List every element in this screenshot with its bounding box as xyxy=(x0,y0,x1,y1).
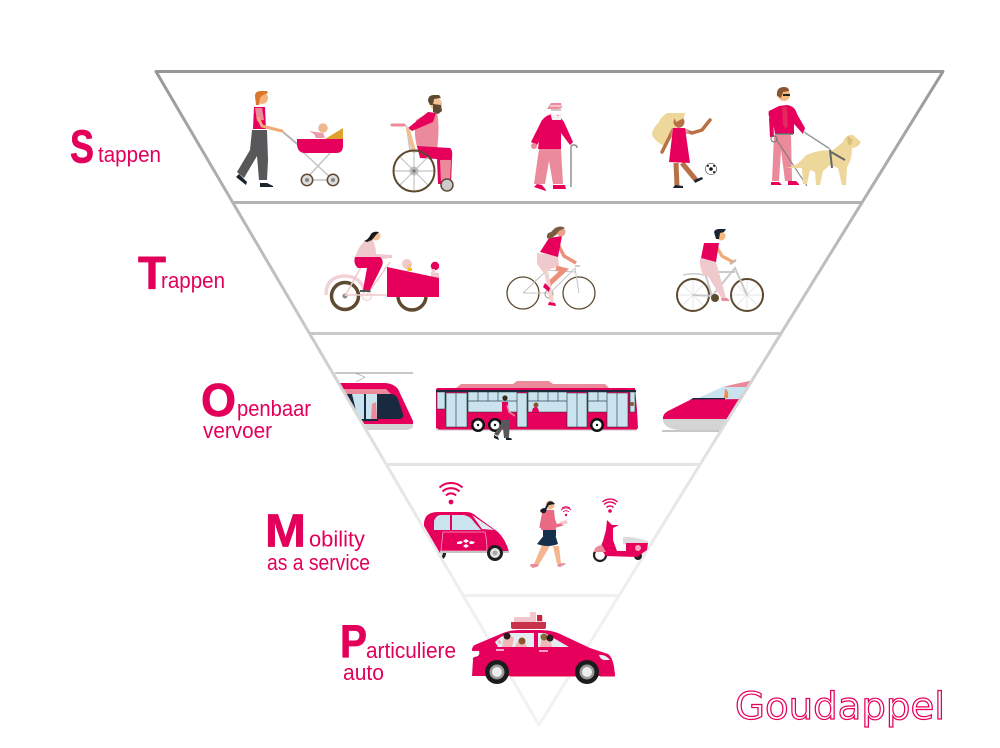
row 3 and 4 vehicles clipped by the funnel xyxy=(330,373,760,561)
electric car details with wifi icon xyxy=(434,483,509,561)
tram xyxy=(330,373,413,430)
figure: girl kicking a ball xyxy=(652,113,717,188)
label: Openbaar vervoer: penbaar xyxy=(237,396,311,421)
label: Stappen: S xyxy=(70,120,94,172)
label: Openbaar vervoer: vervoer xyxy=(203,418,272,443)
figure: blind man with guide dog xyxy=(769,87,861,186)
label: Stappen xyxy=(70,120,161,172)
label: Particuliere auto: articuliere xyxy=(366,638,456,663)
label: Mobility as a service: obility xyxy=(309,527,366,552)
logo: Goudappel: Goudappel xyxy=(735,685,945,728)
label: Openbaar vervoer: O xyxy=(201,374,236,426)
figure: man in wheelchair xyxy=(392,95,453,192)
figure: woman with phone xyxy=(530,500,571,568)
label: Particuliere auto: P xyxy=(340,616,367,668)
figure: woman on bicycle xyxy=(507,226,595,309)
label: Mobility as a service xyxy=(265,505,370,575)
label: Trappen: T xyxy=(138,247,166,299)
label: Mobility as a service: M xyxy=(265,505,306,557)
high speed train xyxy=(662,380,750,432)
label: Mobility as a service: as a service xyxy=(267,550,370,575)
figure: man with stroller xyxy=(236,91,343,187)
label: Trappen: rappen xyxy=(161,268,225,293)
private family car xyxy=(472,612,615,684)
label: Openbaar vervoer xyxy=(201,374,311,443)
electric car body xyxy=(424,512,509,561)
figure: city bus with pedestrian xyxy=(436,381,638,440)
figure: elderly man with cane xyxy=(531,103,577,191)
label: Trappen xyxy=(138,247,225,299)
figure: man on city bike xyxy=(677,229,763,311)
label: Stappen: tappen xyxy=(98,142,161,167)
label: Particuliere auto: auto xyxy=(343,660,384,685)
funnel outline with tiers xyxy=(156,72,943,725)
figure: woman on cargo bike xyxy=(326,232,439,310)
label: Particuliere auto xyxy=(340,616,456,685)
scooter with wifi icon xyxy=(594,499,648,561)
